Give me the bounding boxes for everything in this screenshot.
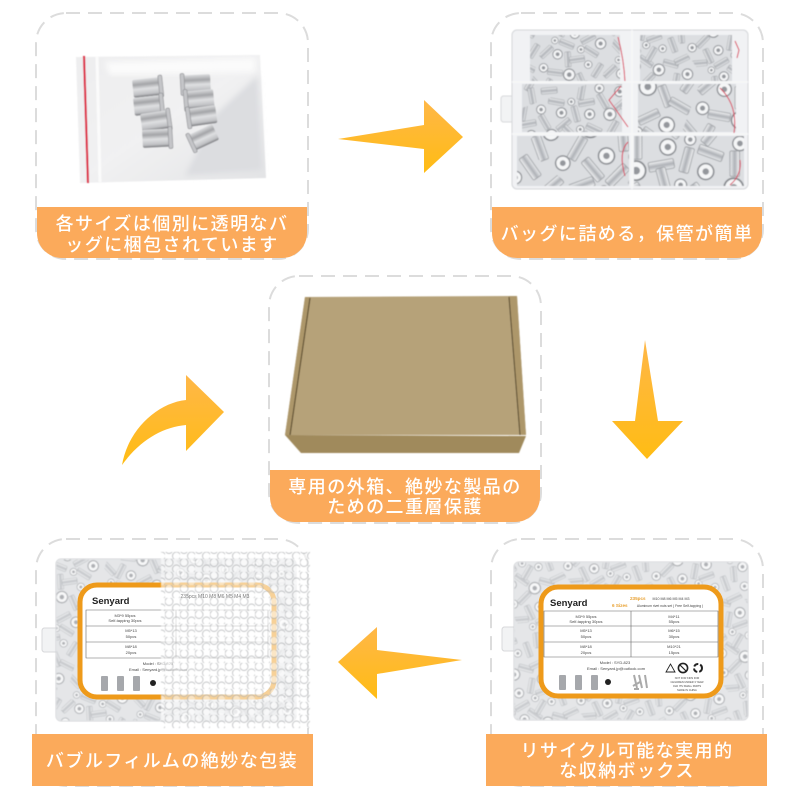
film label text: 235pcs M10 M8 M6 M5 M4 M3 — [181, 594, 250, 600]
arrow: curved — [122, 375, 224, 465]
panel: recyclable box — [486, 539, 767, 786]
photo: box with label — [502, 562, 748, 720]
product label: M5*13 — [125, 628, 138, 633]
caption banner — [270, 470, 540, 522]
product label: M8*18 — [125, 644, 138, 649]
product label: M4*11 — [668, 614, 680, 619]
caption banner — [32, 734, 313, 786]
product label: 6 Sizes — [612, 603, 628, 608]
product label: 15pcs — [669, 650, 679, 655]
panel: individual bags — [36, 13, 308, 259]
product label: M10 M8 M6 M5 M4 M3 — [653, 597, 689, 601]
arrow: left — [338, 627, 462, 699]
panel: storage box — [491, 13, 763, 259]
product label: 20pcs — [126, 650, 136, 655]
product label: Senyard — [92, 596, 130, 607]
caption banner: リサイクル可能な実用的 — [520, 741, 734, 761]
caption banner — [492, 207, 762, 258]
product label: 55pcs — [669, 619, 679, 624]
arrow: down — [612, 340, 683, 459]
caption banner: 各サイズは個別に透明なバ — [56, 213, 288, 234]
product label: 20pcs — [581, 650, 591, 655]
product label: Email : Senyard.jp@outlook.com — [129, 667, 188, 672]
panel: bubble film — [32, 539, 313, 786]
product label: 50pcs — [581, 634, 591, 639]
photo: transparent zip bag with rivet nuts — [76, 55, 266, 183]
product label: M10*21 — [667, 644, 682, 649]
product label: 235pcs — [630, 596, 646, 601]
product label: 50pcs — [126, 634, 136, 639]
product label: M3*9 55pcs — [114, 613, 136, 618]
product label — [541, 587, 721, 696]
product label: NOT FOR KIDS FOR — [675, 676, 699, 680]
product label: Model : SYD-823 — [600, 660, 631, 665]
photo: cardboard box — [285, 296, 526, 453]
caption banner — [486, 734, 767, 786]
arrow: right — [338, 100, 463, 173]
caption banner: バッグに詰める，保管が簡単 — [501, 223, 753, 244]
product label: Self-tapping 30pcs — [108, 618, 142, 623]
product label: Senyard — [550, 598, 588, 609]
bubble film sheet — [161, 552, 310, 728]
caption banner: バブルフィルムの絶妙な包装 — [46, 750, 298, 771]
product label: Email : Senyard.jp@outlook.com — [587, 666, 646, 671]
photo: compartment box with nuts — [501, 30, 748, 189]
product label: MADE IN CHINA — [677, 688, 697, 692]
product label — [80, 585, 274, 697]
product label: M3*9 55pcs — [575, 614, 597, 619]
caption banner: ッグに梱包されています — [65, 235, 279, 255]
product label: OLD ITS SMALL PARTS — [673, 684, 701, 688]
product label: M8*18 — [580, 644, 593, 649]
product label: 30pcs — [669, 634, 679, 639]
caption banner — [37, 207, 307, 258]
product label: Self-tapping 30pcs — [569, 619, 603, 624]
product label: M5*13 — [580, 628, 593, 633]
product label: Model : SYD-823 — [143, 661, 174, 666]
caption banner: ための二重層保護 — [327, 497, 483, 517]
caption banner: 専用の外箱、絶妙な製品の — [288, 477, 522, 497]
product label: CHILDREN UNDER 3 YEAR — [670, 680, 704, 684]
panel: outer carton — [269, 276, 541, 523]
photo: box wrapped in bubble film — [42, 552, 310, 728]
product label: Aluminum rivet nuts set ( Free Self-tapping ) — [637, 604, 703, 608]
product label: M6*15 — [668, 628, 681, 633]
caption banner: な収納ボックス — [559, 761, 695, 781]
